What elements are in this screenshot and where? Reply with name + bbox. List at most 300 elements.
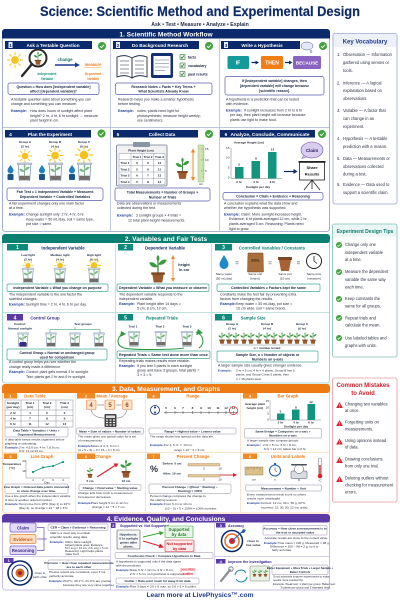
step 4: plan the experiment: Group B [49,140,62,144]
accuracy: true value [246,543,261,547]
tray of plants [250,566,270,581]
card: data table: (cm) [27,405,33,409]
step 1: ask a testable question: How does hours of sunlight affect plant [30,109,92,113]
vocabulary list: Hypothesis — A testable [343,136,388,141]
card: sample size: n = 15 plants total. [236,377,262,381]
number line: 9 [200,406,202,410]
card: data table: 8 [46,416,48,420]
claim evidence reasoning [10,523,109,556]
mistakes list: at once. [345,408,360,413]
card: line graph: to show change over time. [17,489,56,493]
sidebar: common mistakes to avoid [332,378,397,502]
step 6: analyze, conclude, communicate: Evidence: 6 hr plants averaged 12 cm, while 2 hr [229,217,308,221]
card: mean average [76,393,144,452]
water drops and beakers [8,165,75,180]
card: line graph: 1 [32,478,34,482]
card: range: 3 [152,394,155,398]
change and measure diagram [38,57,102,81]
clipboard data table: Trial 4 [121,180,130,184]
icon: cycle arrows [235,570,247,582]
step 5: collect data: 5 [117,132,120,138]
number line: 8 [192,406,194,410]
sidebar: key vocabulary [333,34,397,204]
mistakes list: Forgetting units on [345,420,380,424]
mistakes list: Drawing conclusions [345,456,383,462]
card: sample size: Sample Size, n = Number of objects or [236,353,300,357]
vocabulary list: can change in an [343,116,375,121]
vocabulary list: tools. [343,68,353,73]
if then because boxes: THEN [265,60,279,66]
panel: data, measurement, and graphs [2,384,330,513]
mistakes list: of data. [345,444,359,450]
step 6: analyze, conclude, communicate: Analyze, Conclude, Communicate [230,132,310,137]
clipboard data table: 7 [147,174,149,178]
bar chart: average height: 6 hr [270,180,276,184]
card: bar graph: 2 hr [278,420,284,424]
step 3: write a hypothesis: Write a Hypothesis [241,43,283,48]
card: independent variable: Low light [21,253,35,257]
card: percent change: From 5 cm to 10 cm: [164,502,193,506]
bar chart: average height: Average Height (cm) [234,140,264,144]
rulers: 5 [203,478,205,482]
supported vs not supported: Example: [116,584,130,588]
card: mean average: Mean of 4, 5, 6 cm = [91,444,119,448]
card: controlled variables: (measure) [307,276,321,280]
tips list: same for all groups. [345,304,381,308]
supported vs not supported: Rise 3 days = 0.6 + 6 max, so 0.6 + 6 = 6 outlier. [130,584,197,588]
supported vs not supported [111,523,213,588]
supported vs not supported: by data [173,547,187,551]
clipboard data table: 11 [158,167,161,171]
card: change: 5 cm [86,479,94,483]
card: bar graph: 6 hr = 12 cm; tallest bar is 6 hr. [264,447,307,451]
card: mean average: 6 [125,403,129,409]
card: units and labels: 8 [249,454,252,459]
card: control group: A control group helps you see whether the [9,360,76,364]
vocabulary list: 2. [337,80,340,86]
card: sample size: 6 [222,315,225,321]
card: line graph: is time or another ordered number. [5,498,53,502]
icon: target with clustered hits [8,561,32,585]
step 3: write a hypothesis: plants use light to make food. [230,118,277,122]
claim evidence reasoning: CER is a clear way to explain [50,531,91,535]
tips list: at a time. [345,257,362,262]
step 3: write a hypothesis: If [independent variable] changes, then [242,79,307,83]
step 3: write a hypothesis: [dependent variable] will change because [240,84,309,88]
card: percent change: Example: [150,502,164,506]
bar chart: average height: 4 hr [253,180,260,184]
precision: because they are very close together. [63,583,115,587]
bar chart: average height: 5 [228,166,230,170]
step 2: background research: Research helps you make a smarter hypothesis [118,98,194,102]
card: control group: 4 [14,315,17,321]
accuracy: Accuracy [228,524,244,528]
plant, height arrow and ruler: cm [199,182,204,186]
step 2: background research: 2 [117,43,120,48]
card: repeated trials: Trial 2 [156,324,165,328]
group jars [17,163,92,181]
card: repeated trials: Repeating trials makes results more reliable. [119,359,190,363]
icon: target with arrow [222,529,246,552]
plant, height arrow and ruler: 5 [205,169,207,173]
step 5: collect data: Number of Trials [149,196,176,200]
card: sample size: n = number tested [254,346,280,350]
section heading 3: 3. Data, Measurement, and Graphs [112,386,220,393]
card: mean average: of measurements. [78,438,103,442]
number line: 5 [165,406,167,410]
checklist [180,54,208,76]
number line: 10 [207,406,211,410]
card: data table: Data Table [24,394,46,398]
step 2: background research: Example: [118,109,134,113]
section heading 2: 2. Variables and Fair Tests [125,236,207,243]
step 6: analyze, conclude, communicate [220,130,326,231]
step 2: background research: use centimeters. [137,118,163,122]
card: repeated trials: 5 [124,315,127,321]
arrow [284,169,298,174]
card: controlled variables [215,244,322,310]
tips list [336,242,389,348]
step 1: ask a testable question [5,41,106,122]
step 6: analyze, conclude, communicate: Claim: More sunlight increased height. [241,212,302,216]
step 4: plan the experiment: Group C [78,140,91,144]
section heading 3 [2,384,330,393]
card: change: Change = Final value − Starting value [83,486,138,490]
step 4: plan the experiment: (6 hr) [80,144,88,148]
card: percent change: % [150,464,158,474]
icon: open book [117,56,147,78]
step 4: plan the experiment: Change sunlight only: 2 hr, 4 hr, 6 hr. [26,212,85,216]
step 2: background research: What Scientists Already Know [138,89,189,93]
mistakes list: errors. [345,490,357,494]
bar chart: average height: 15 [226,146,230,150]
step 3: write a hypothesis: per day, then plant height will increase because [230,113,305,117]
section heading 4 [2,514,330,523]
card: sample size: Group C [296,322,309,326]
card: line graph: 4 [62,478,64,482]
presentation board: Share [306,165,318,170]
card: dependent variable: Example: [119,302,135,306]
supported vs not supported: outlier [182,572,194,576]
improve the investigation: 4 [220,560,222,564]
card: bar graph: 12 [309,400,313,404]
card: mean average: 4 [89,403,93,409]
number line: 12 [224,406,228,410]
card: bar graph: 5 [267,412,269,416]
card: sample size: Group A [226,322,239,326]
card: sample size: (2 hr) [228,326,236,330]
clipboard data table: Trial 2 [121,167,130,171]
title: Science: Scientific Method and Experimental Design [40,4,360,19]
icon: tablet [151,53,173,78]
card: mean average: Example: [78,444,92,448]
clipboard data table: 12 [158,161,161,165]
card: repeated trials: Repeated Trials = Same test done more than once [119,353,208,357]
accuracy: fairly accurate. [272,548,292,552]
card: bar graph: 4 [249,394,252,398]
vocabulary list: 3. [337,108,340,113]
mistakes list: Using opinions instead [345,438,387,443]
tips list: independent variable [345,250,384,255]
card: range [147,393,238,452]
card: control group: Test: plants get 2 hr and 6 hr sunlight. [26,375,86,379]
supported vs not supported: Hypothesis: [120,532,137,536]
clipboard data table: Trial 1 [121,161,130,165]
card: range: The range shows how spread out the data are. [150,434,214,438]
card: bar graph: 6 hr [308,420,315,424]
card: percent change: the starting amount. [150,498,177,502]
card: units and labels: results more meaningful. [247,496,281,500]
vocabulary list: support a scientific claim. [343,190,389,195]
mistakes list: Deleting outliers without [345,476,389,480]
card: percent change: Before: 5 cm [163,462,182,466]
card: line graph: Example: [5,502,19,506]
card: dependent variable: Dependent Variable [145,246,186,250]
clipboard data table: Plant Height (cm) [128,148,154,152]
card: data table: 6 hr: 11,12,13 cm. [19,449,44,453]
step 3: write a hypothesis: with evidence. [226,102,249,106]
accuracy: 3 [220,524,222,528]
card: controlled variables: Same soil [248,272,262,276]
card: line graph: (°C) [9,466,15,470]
bar chart: average height: Sunlight per day [246,185,270,189]
rulers [188,464,237,482]
supported vs not supported: Data: 6 hr = 12 cm, 4 hr = 8 cm, [130,568,174,572]
card: control group: change really made a difference. [9,365,61,369]
step 3: write a hypothesis: If sunlight increases from 2 hr to 6 hr [244,108,303,112]
card: controlled variables: (brand) [250,276,260,280]
footer link: Learn more at LivePhysics™.com [146,592,254,599]
vocabulary list: Variable — A factor that [343,108,387,113]
vocabulary list: during a test. [343,172,367,176]
card: data table: Sunlight [7,401,19,405]
clipboard data table: 12 [158,180,161,184]
card: independent variable: Medium light [50,253,70,257]
step 4: plan the experiment: pot size = same. [26,222,52,226]
card: sample size: Sample Size [240,316,266,320]
claim evidence reasoning: CER = Claim + Evidence + Reasoning [51,526,106,530]
card: controlled variables: Same pot [278,272,292,276]
card: change: 12 cm [122,479,131,483]
step 3: write a hypothesis [221,41,327,122]
card: line graph: (Day 4), so change = 24 − 18 = 6°C. [19,506,69,510]
supported vs not supported: A hypothesis is supported only if the data agree [116,560,181,564]
section heading 4: 4. Evidence, Quality, and Conclusions [107,516,226,523]
claim evidence reasoning: Example: [50,540,64,544]
card: bar graph: Same Bridge = Categories on x-axis + [255,430,311,434]
clipboard data table: 9 [147,167,149,171]
card: line graph: 2 [42,478,44,482]
card: percent change: (10 − 5) ÷ 5 × 100% = 100% increase. [165,506,217,510]
step 4: plan the experiment: Fair Test = 1 Independent Variable + Measured [17,190,93,194]
step 5: collect data: Data are observations or measurements [117,202,181,206]
card: units and labels: Example: [247,501,261,505]
vocabulary list: Inference — A logical [343,80,382,86]
card: sample size: 2 hr = 5 cm, 4 hr = 4 plants, Group B has 5 [236,368,295,372]
panel: scientific method workflow [2,29,330,232]
card: controlled variables: (50 mL/day) [216,276,232,280]
accuracy: Difference = 100 − 98 = 2 g, so it is [270,544,318,548]
card: data table: 13 [63,422,66,426]
step 1: ask a testable question: A testable question asks about something you can [11,98,91,102]
card: data table: 12 [45,422,49,426]
step 5: collect data [113,130,213,222]
card: line graph: 24 [22,459,26,463]
card: line graph: Day [44,480,50,484]
card: independent variable: High light [87,253,101,257]
card: data table: 2 hr [10,411,17,415]
icon: soil bag: SOIL [251,258,261,262]
card: repeated trials: Trial 1 [129,324,138,328]
card: dependent variable: 2 [124,245,127,251]
card: repeated trials: Trial 3 [183,324,192,328]
step 3: write a hypothesis: 3 [225,43,228,48]
card: units and labels: Incorrect: 12, 30, 50, 22 (no units). [261,506,308,510]
vocabulary list [337,52,393,195]
card: bar graph: 5 [280,410,282,414]
supported vs not supported: with the prediction. [116,564,142,568]
claim evidence reasoning: Claim [17,526,29,530]
vocabulary list: 5. [337,156,340,161]
card: sample size: Numbers on y-axis [252,357,283,361]
clipboard data table: Trial 1 [133,155,142,159]
step 6: analyze, conclude, communicate: A conclusion explains what the data show and [224,202,297,206]
vocabulary list: experiment. [343,124,364,129]
icon: scale: g [298,478,300,482]
change and measure diagram: measure [85,62,102,67]
number line: 11 [216,406,220,410]
bar chart: average height: 5 [238,162,240,166]
icon: calculator [104,414,116,427]
precision: perfectly accurate. [49,574,74,578]
vocabulary list: 4. [337,136,340,141]
vocabulary list: 6. [337,182,340,187]
step 5: collect data: 3 sunlight groups × 4 trials = [136,214,181,218]
card: data table: 2 hr: 4,5,6 cm; 4 hr: 7,8,9 cm; [19,446,60,450]
card: independent variable: (2 hr) [24,258,32,262]
step 6: analyze, conclude, communicate: light to grow. [229,227,249,231]
card: controlled variables: Controlled Variables / Constants [239,246,306,250]
rulers: 10 [218,478,222,482]
precision [4,558,115,587]
sidebar: experiment design tips [332,224,397,357]
subtitle: Ask • Test • Measure • Analyze • Explain [151,22,249,28]
if then because boxes: BECAUSE [296,60,318,66]
card: line graph [3,454,71,510]
bar chart: average height: 0 [228,176,230,180]
card: range: Example: [150,443,164,447]
improve the investigation: Example: Weak test: 1 plant per group. Better test: [273,582,336,586]
number line: 13 [232,406,235,410]
card: dependent variable: 5 cm, 8 cm, 12 cm. [137,306,167,310]
card: percent change: Percent change compares the change to [150,494,206,498]
card: data table: Trial 1 [26,401,35,405]
card: data table: 4 [29,411,31,415]
mistakes list: from only one trial. [345,464,379,468]
step 5: collect data: collected during the test. [117,206,156,210]
card: dependent variable [117,244,209,310]
row of plants [218,332,317,344]
clipboard data table: 5 [136,167,138,171]
card: line graph: Temp rose from 18°C (Day 1) to 24°C [19,502,71,506]
card: percent change [147,454,237,510]
section heading 1: 1. Scientific Method Workflow [119,31,214,38]
card: independent variable: Independent Variable = What you change on purpose [13,286,102,290]
card: bar graph: A larger sample size compare groups. [247,439,299,443]
card: control group: Control Group [30,316,60,320]
supported vs not supported: Conclusion Check = Compare Hypothesis to Data [128,554,201,558]
card: control group: Control: [14,322,26,326]
precision: Precise results are consistent, even if not [49,570,106,574]
card: control group: Normal sunlight [8,326,32,330]
card: repeated trials: 3 × 3 = 9. [137,373,152,377]
plant, height arrow and ruler [176,145,209,186]
step 6: analyze, conclude, communicate: whether the hypothesis was supported. [224,206,286,210]
card: data table: 1 [9,394,12,398]
step 3: write a hypothesis: A hypothesis is a prediction that can be tested [226,98,299,102]
card: percent change: 7 [152,454,155,459]
icon: clock [306,254,322,268]
card: data table: Trial 3 [60,401,69,405]
step 6: analyze, conclude, communicate: 6 [225,132,228,138]
card: line graph: 18 [22,469,26,473]
supported vs not supported: 2 hr = 5 cm, so hypothesis is supported. [130,572,185,576]
card: sample size: Example: [218,368,232,372]
step 2: background research: Do Background Research [132,43,188,48]
card: controlled variables: Constants make the test fair by preventing extra [220,292,296,296]
clipboard data table: Trial 2 [144,155,153,159]
supported vs not supported: plants. [124,544,134,548]
number line: 7 [182,406,184,410]
cycle arrows [118,332,203,350]
precision: close to [35,571,46,575]
card: data table: A data table keeps results organized before [5,438,65,442]
step 1: ask a testable question: 1 [9,43,12,48]
card: controlled variables: (10 cm) [280,276,290,280]
improve the investigation: Improve the Investigation [228,560,272,564]
card: change: Plant height 5 cm to 12 cm: [91,501,129,505]
if then because boxes: IF [236,60,240,66]
sidebar: key vocabulary: Key Vocabulary [343,40,388,46]
claim evidence reasoning: scientific results using data. [50,535,88,539]
card: change: change = 12 − 5 = 7 cm. [92,505,126,509]
card: units and labels [243,454,322,510]
card: dependent variable: The dependent variable responds to the [119,292,183,296]
tips list: Change only one [345,242,377,247]
bar chart: average height: 10 [226,156,230,160]
improve the investigation: results more trustworthy. [273,578,304,582]
card: independent variable [7,244,108,306]
step 4: plan the experiment: (2 hr) [21,144,29,148]
supported vs not supported: Example: [116,568,130,572]
section heading 1 [2,29,330,38]
tips list: each time. [345,284,364,290]
vocabulary list: Evidence — Data used to [343,182,390,187]
step 2: background research: photosynthesis; measure height weekly; [137,114,201,118]
card: data table: 4 hr [10,416,17,420]
card: mean average: Mean = Sum of values ÷ Number of values [79,429,141,433]
step 3: write a hypothesis: [scientific reason]. [259,89,290,93]
rulers: 5 [203,466,205,470]
card: dependent variable: Plant height after 14 days = [137,302,181,306]
card: controlled variables: Same water [216,272,232,276]
arrows to outcomes [143,531,164,548]
vocabulary list: Data — Measurements or [343,156,391,161]
precision: Example: [49,579,63,583]
card: change [77,454,141,509]
card: bar graph: 15 [266,399,269,403]
card: control group: Control Group = Normal or unchanged group [20,351,94,355]
